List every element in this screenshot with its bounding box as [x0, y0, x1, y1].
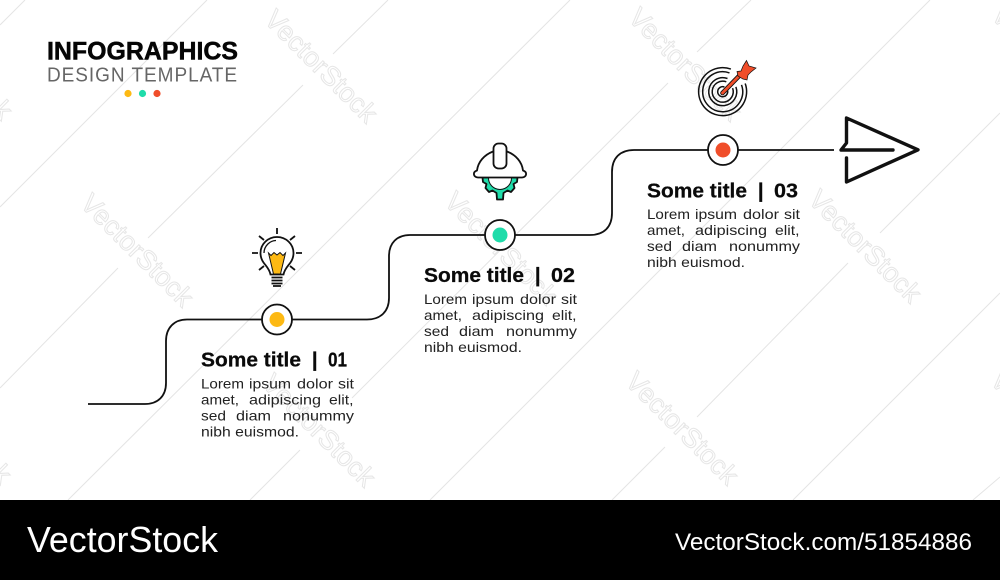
- step 1 text: amet,: [201, 392, 239, 408]
- step 1 text: Lorem: [201, 376, 244, 392]
- step 1 text: sit: [338, 376, 354, 392]
- footer bar: VectorStock.com/51854886: [675, 529, 972, 556]
- step 2 text: elit,: [552, 308, 576, 323]
- step 2 text: Some title: [424, 264, 524, 287]
- title dots: [124, 90, 161, 97]
- title: INFOGRAPHICS: [47, 38, 238, 66]
- step 3 text: Lorem: [647, 207, 690, 222]
- node 2: [485, 220, 515, 250]
- step 1 text: nibh euismod.: [201, 424, 299, 440]
- footer bar: VectorStock: [27, 519, 219, 560]
- watermark: VectorStock: VectorStock: [803, 184, 928, 309]
- footer bar: [0, 500, 1000, 580]
- step 1 text: |: [312, 348, 318, 372]
- watermark: VectorStock: VectorStock: [257, 368, 382, 493]
- icon: light bulb: [252, 228, 302, 286]
- arrow: paper plane: [841, 118, 918, 182]
- node 1: [262, 304, 292, 334]
- watermark: VectorStock: VectorStock: [439, 186, 564, 311]
- step 2 text: sit: [561, 292, 577, 307]
- step 2 text: nonummy: [506, 324, 577, 339]
- step 3 text: elit,: [775, 223, 800, 238]
- step 2 text: ipsum: [472, 292, 514, 307]
- step 2 text: sed: [424, 324, 449, 339]
- step 2 text: 02: [551, 264, 575, 287]
- step 3 text: Some title: [647, 179, 747, 202]
- step 1 text: diam: [236, 408, 271, 424]
- watermark: VectorStock: VectorStock: [620, 366, 745, 491]
- step 1 text: adipiscing: [249, 392, 321, 408]
- watermark: VectorStock: VectorStock: [623, 2, 748, 127]
- step 1 text: elit,: [329, 392, 354, 408]
- step 2 text: |: [535, 264, 541, 287]
- step 2 text: [424, 264, 577, 355]
- step 1 text: ipsum: [249, 376, 291, 392]
- step 3 text: 03: [774, 179, 798, 202]
- step 3 text: dolor: [743, 207, 779, 222]
- step 3 text: [647, 179, 800, 270]
- step 1 text: nonummy: [283, 408, 354, 424]
- icon: target with dart: [699, 60, 756, 116]
- step 3 text: |: [758, 179, 764, 202]
- title: DESIGN TEMPLATE: [47, 64, 238, 86]
- step 3 text: nonummy: [729, 239, 800, 254]
- step 3 text: amet,: [647, 223, 685, 238]
- node 3: [708, 135, 738, 165]
- step 3 text: sed: [647, 239, 672, 254]
- step 2 text: Lorem: [424, 292, 467, 307]
- step 1 text: [201, 348, 354, 440]
- step 3 text: sit: [784, 207, 800, 222]
- step 2 text: amet,: [424, 308, 462, 323]
- stepped timeline path: [88, 150, 834, 404]
- watermark: VectorStock: VectorStock: [75, 188, 200, 313]
- step 2 text: nibh euismod.: [424, 340, 522, 355]
- step 2 text: diam: [459, 324, 494, 339]
- step 3 text: adipiscing: [695, 223, 767, 238]
- step 1 text: 01: [328, 348, 347, 372]
- step 2 text: dolor: [520, 292, 556, 307]
- step 1 text: sed: [201, 408, 226, 424]
- step 3 text: ipsum: [695, 207, 737, 222]
- step 2 text: adipiscing: [472, 308, 544, 323]
- step 1 text: Some title: [201, 348, 301, 372]
- watermark: VectorStock: VectorStock: [259, 4, 384, 129]
- step 1 text: dolor: [297, 376, 333, 392]
- step 3 text: nibh euismod.: [647, 255, 745, 270]
- icon: helmet and gear: [474, 144, 526, 200]
- step 3 text: diam: [682, 239, 717, 254]
- title: [47, 38, 238, 86]
